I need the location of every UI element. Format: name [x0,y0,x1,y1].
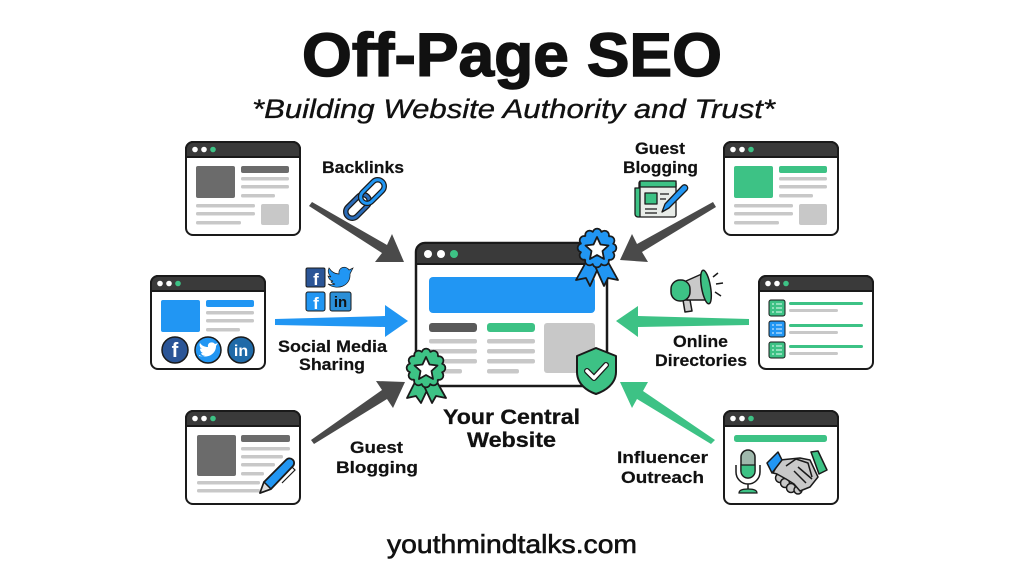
label: online directories: Directories [655,351,747,370]
label: influencer outreach: Influencer [617,448,708,467]
label: online directories: Online [673,332,728,351]
label: social media sharing [278,337,388,374]
label: guest blogging bottom: Guest [350,438,403,457]
label: influencer outreach [617,448,708,487]
icon: microphone [736,450,760,493]
arrow: influencer outreach to centre [620,382,715,444]
label: guest blogging top: Guest [635,139,685,158]
icon: social media logos: in [334,294,347,311]
label: guest blogging top: Blogging [623,158,698,177]
arrow: guest blogging top to centre [620,202,716,262]
arrow: backlinks to centre [309,202,404,262]
label: influencer outreach: Outreach [621,468,704,487]
label: your central website: Your Central [443,406,580,429]
panel: guest blogging window top right [724,142,838,235]
arrow: online directories to centre [616,306,749,337]
label: guest blogging top [623,139,698,177]
panel: online directories window [759,276,873,369]
icon: trust shield [577,348,616,394]
label: social media sharing: Social Media [278,337,388,356]
icon: social media logos: f [313,270,319,289]
icon: chain link [343,177,387,221]
panel: influencer outreach window [724,411,838,504]
label: backlinks: Backlinks [322,158,404,177]
label: social media sharing: Sharing [299,355,365,374]
icon: green award ribbon [407,352,446,403]
label: online directories [655,332,747,370]
icon: blue award ribbon [576,232,618,286]
icon: megaphone [671,269,723,312]
arrow: social media to centre [275,305,408,337]
panel: backlinks window [186,142,300,235]
panel: guest blogging window bottom left [186,411,300,504]
icon: handshake [767,451,827,494]
icon: facebook circle: f [172,340,179,362]
title: Off-Page SEO [302,21,722,89]
icon: linkedin circle: in [234,343,248,360]
arrow: guest blogging bottom to centre [311,381,405,444]
panel: social media window [151,276,265,369]
subtitle: *Building Website Authority and Trust* [252,94,777,124]
panel: central website window [416,243,607,386]
icon: social media logos [306,267,353,313]
icon: newspaper and pen [635,181,688,217]
label: your central website: Website [467,429,556,452]
label: guest blogging bottom: Blogging [336,458,418,477]
label: your central website [443,406,580,452]
icon: pen [260,458,295,493]
label: guest blogging bottom [336,438,418,477]
icon: social media logos: f [313,294,319,313]
footer: website address: youthmindtalks.com [387,529,637,559]
icon: twitter circle [195,337,221,363]
